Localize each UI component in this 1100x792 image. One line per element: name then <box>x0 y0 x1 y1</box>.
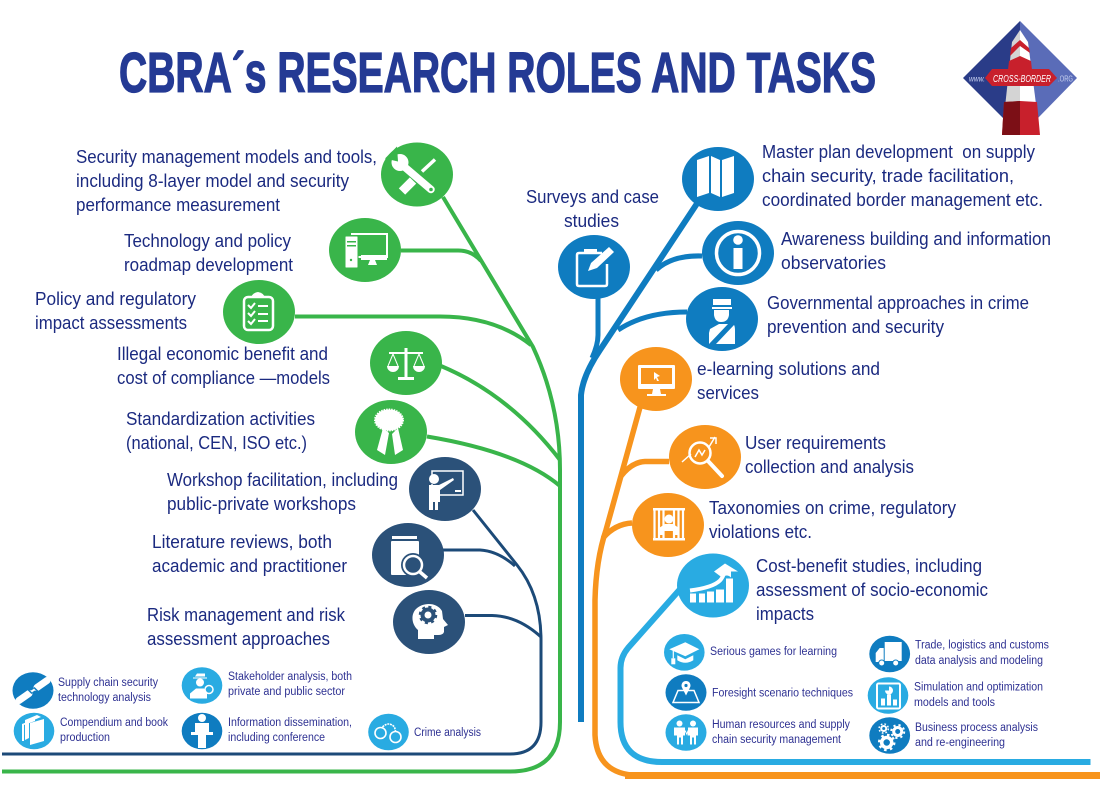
node: illegal economic benefit: Illegal economic benefit and <box>117 343 328 364</box>
node: cost-benefit <box>677 554 988 624</box>
icon: truck <box>876 642 902 666</box>
node: cost-benefit: assessment of socio-economic <box>756 579 988 600</box>
task: compendium: Compendium and book <box>60 717 168 729</box>
task: stakeholder analysis: Stakeholder analysis, both <box>228 671 352 683</box>
node: policy impact assessments <box>35 280 295 344</box>
node: workshop facilitation: Workshop facilitation, including <box>167 469 398 490</box>
icon: books <box>22 715 44 745</box>
node: risk management <box>147 590 465 654</box>
node: literature reviews: Literature reviews, both <box>152 531 332 552</box>
light blue branch <box>620 587 1090 762</box>
task: foresight <box>666 674 853 711</box>
icon: speaker at podium <box>191 714 213 748</box>
task: stakeholder analysis: private and public sector <box>228 686 345 698</box>
node: awareness building <box>702 221 1051 285</box>
node: policy impact assessments: Policy and regulatory <box>35 288 197 309</box>
node: master plan: coordinated border management etc. <box>762 189 1043 210</box>
icon: head with gear <box>412 604 448 639</box>
node: e-learning <box>620 347 880 411</box>
task: serious games: Serious games for learning <box>710 646 837 658</box>
icon: award ribbon <box>375 410 403 455</box>
node: risk management: Risk management and risk <box>147 604 346 625</box>
task: human resources <box>666 714 850 751</box>
icon: checklist clipboard <box>244 292 273 330</box>
icon: chain link <box>19 680 47 700</box>
node: technology roadmap: Technology and policy <box>124 230 292 251</box>
node: surveys and case studies: studies <box>564 210 619 231</box>
task: simulation: Simulation and optimization <box>914 682 1043 694</box>
panel: small tasks bottom right <box>664 634 1049 754</box>
icon: prisoner behind bars <box>653 508 685 540</box>
node: governmental approaches: Governmental approaches in crime <box>767 292 1029 313</box>
node: standardization: Standardization activities <box>126 408 315 429</box>
icon: magnifier with trend <box>682 437 722 476</box>
task: supply chain technology: Supply chain security <box>58 677 158 689</box>
icon: police officer <box>709 299 735 344</box>
blue branch tree <box>581 196 702 722</box>
logo: lighthouse cross-border <box>963 21 1077 135</box>
node: workshop facilitation: public-private workshops <box>167 493 356 514</box>
task: supply chain technology <box>12 672 158 709</box>
task: supply chain technology: technology analysis <box>58 692 151 704</box>
node: user requirements: User requirements <box>745 432 886 453</box>
icon: detective with magnifier <box>190 674 213 698</box>
task: information dissemination <box>182 713 352 749</box>
task: compendium <box>14 713 168 749</box>
icon: desktop computer <box>345 234 387 268</box>
logo: lighthouse cross-border: www. <box>969 74 985 84</box>
node: master plan: chain security, trade facilitation, <box>762 165 1014 186</box>
navy branch tree <box>2 510 541 754</box>
node: taxonomies: violations etc. <box>709 521 812 542</box>
task: business process <box>869 717 1038 754</box>
node: literature reviews <box>152 523 444 587</box>
task: trade logistics <box>869 636 1049 672</box>
node: security management models: Security management models and tools, <box>76 146 377 167</box>
green branch tree <box>2 197 560 772</box>
node: security management models <box>76 142 453 215</box>
node: awareness building: Awareness building and information <box>781 228 1051 249</box>
right roles <box>526 141 1051 624</box>
logo: lighthouse cross-border: CROSS-BORDER <box>993 74 1051 85</box>
icon: balance scales <box>387 348 425 380</box>
node: surveys and case studies <box>526 186 659 299</box>
node: taxonomies <box>632 493 957 557</box>
logo: lighthouse cross-border: .ORG <box>1058 74 1073 84</box>
icon: monitor with cursor <box>638 365 675 396</box>
node: user requirements <box>669 425 914 489</box>
node: standardization: (national, CEN, ISO etc.) <box>126 432 307 453</box>
icon: folded map <box>697 156 734 197</box>
node: workshop facilitation <box>167 457 481 521</box>
left roles <box>35 142 481 654</box>
icon: gears <box>879 724 904 750</box>
task: crime analysis: Crime analysis <box>414 727 481 739</box>
panel: small tasks bottom left <box>12 667 481 750</box>
node: policy impact assessments: impact assessments <box>35 312 187 333</box>
node: illegal economic benefit <box>117 331 442 395</box>
node: illegal economic benefit: cost of compliance —models <box>117 367 330 388</box>
task: information dissemination: Information dissemination, <box>228 717 352 729</box>
task: information dissemination: including conference <box>228 732 325 744</box>
node: technology roadmap <box>124 218 401 282</box>
task: simulation <box>868 677 1043 714</box>
node: technology roadmap: roadmap development <box>124 254 293 275</box>
icon: map with pin <box>673 681 699 702</box>
task: trade logistics: data analysis and modeling <box>915 655 1043 667</box>
node: governmental approaches: prevention and security <box>767 316 945 337</box>
node: awareness building: observatories <box>781 252 886 273</box>
task: human resources: Human resources and supply <box>712 719 850 731</box>
node: surveys and case studies: Surveys and case <box>526 186 659 207</box>
orange branch tree <box>595 400 1100 776</box>
icon: growth bars with arrow <box>690 564 738 602</box>
icon: teacher at board <box>425 471 463 510</box>
task: foresight: Foresight scenario techniques <box>712 688 853 700</box>
node: risk management: assessment approaches <box>147 628 330 649</box>
task: serious games <box>664 634 837 671</box>
icon: book with magnifier <box>391 536 427 578</box>
task: human resources: chain security management <box>712 734 842 746</box>
node: security management models: performance measurement <box>76 194 280 215</box>
node: cost-benefit: Cost-benefit studies, including <box>756 555 982 576</box>
task: compendium: production <box>60 732 110 744</box>
icon: clipboard with pencil <box>577 247 614 286</box>
icon: wrench and screwdriver <box>385 146 435 192</box>
task: business process: Business process analysis <box>915 722 1038 734</box>
task: crime analysis <box>368 714 481 750</box>
node: literature reviews: academic and practitioner <box>152 555 347 576</box>
node: master plan <box>682 141 1043 211</box>
node: cost-benefit: impacts <box>756 603 814 624</box>
node: security management models: including 8-layer model and security <box>76 170 350 191</box>
node: e-learning: e-learning solutions and <box>697 358 880 379</box>
task: stakeholder analysis <box>182 667 352 704</box>
node: user requirements: collection and analysis <box>745 456 914 477</box>
node: governmental approaches <box>686 287 1029 351</box>
node: e-learning: services <box>697 382 759 403</box>
node: taxonomies: Taxonomies on crime, regulatory <box>709 497 957 518</box>
icon: information <box>716 232 760 274</box>
task: simulation: models and tools <box>914 697 995 709</box>
node: master plan: Master plan development on supply <box>762 141 1036 162</box>
icon: graduation cap <box>669 642 699 664</box>
icon: chart report <box>877 684 900 708</box>
icon: handcuffs <box>375 724 401 742</box>
task: trade logistics: Trade, logistics and customs <box>915 640 1049 652</box>
node: standardization <box>126 400 427 464</box>
icon: two people <box>674 720 698 744</box>
task: business process: and re-engineering <box>915 737 1005 749</box>
